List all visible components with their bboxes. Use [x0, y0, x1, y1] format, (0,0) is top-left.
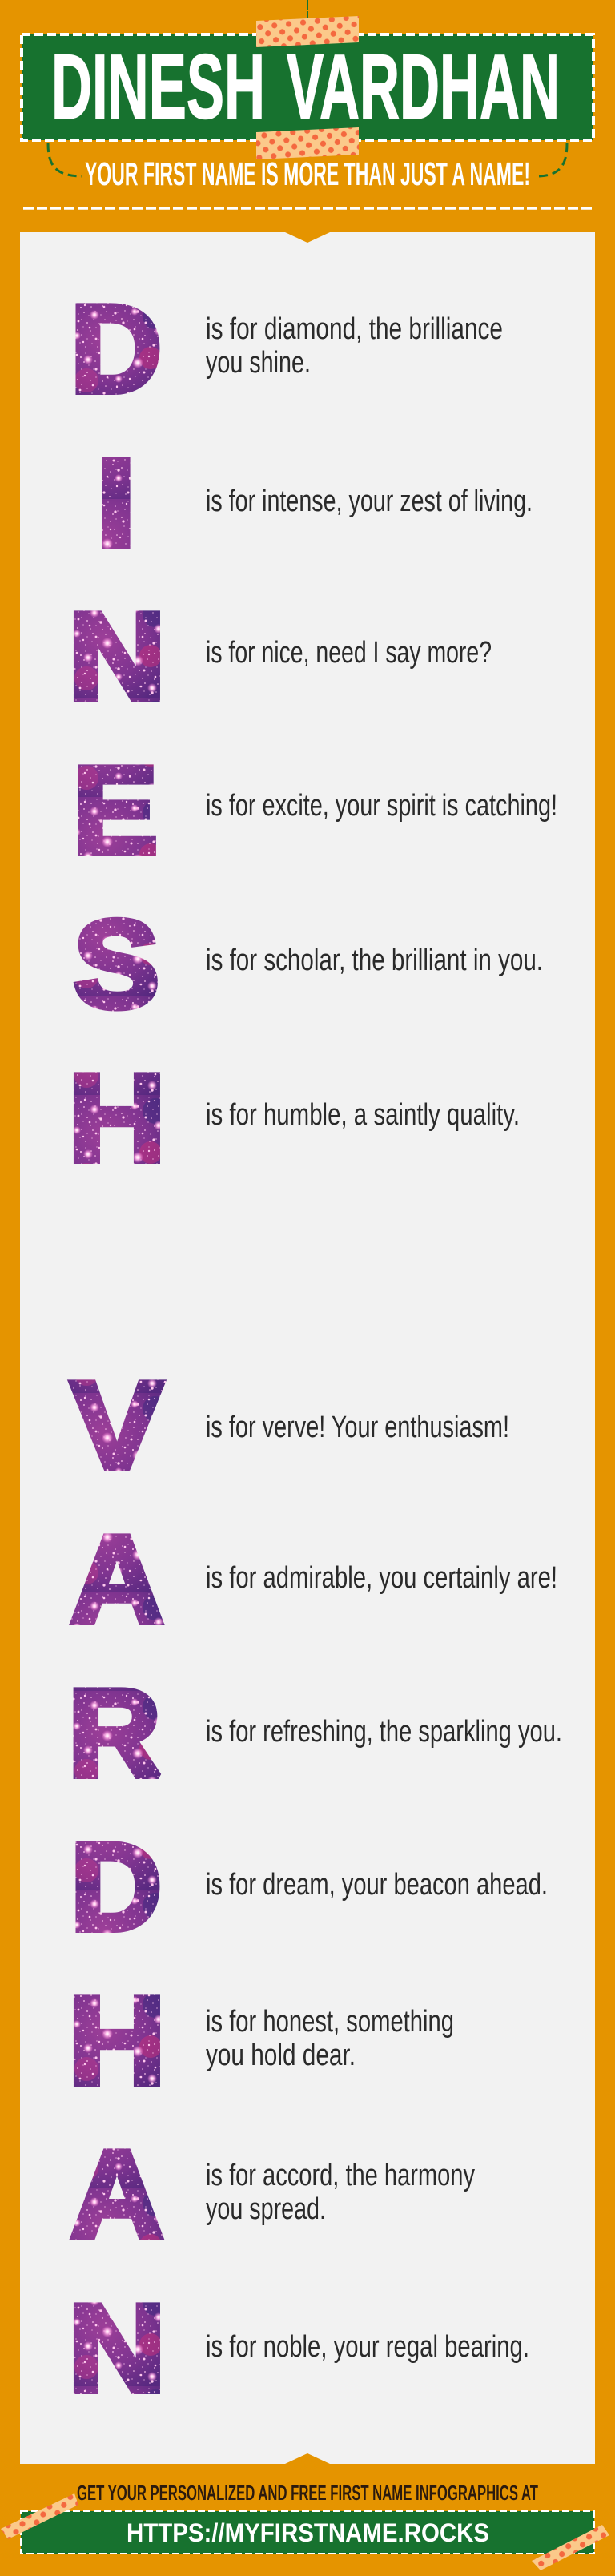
line: H	[206, 2005, 454, 2072]
tape: bottom of title	[256, 127, 359, 159]
line: N: is for nice, need I say more?	[206, 636, 492, 670]
line: D: you shine.	[206, 346, 311, 380]
hanging string	[307, 0, 308, 21]
letter E: E	[73, 741, 158, 879]
line: A: you spread.	[206, 2192, 326, 2226]
letter N: N	[68, 2279, 166, 2417]
line: D	[206, 312, 503, 380]
letter V: V	[71, 1356, 163, 1495]
letter A: A	[70, 2125, 163, 2264]
letter A: A	[70, 1510, 163, 1648]
line: H: is for humble, a saintly quality.	[206, 1098, 520, 1132]
line: A: is for accord, the harmony	[206, 2159, 475, 2192]
title banner	[22, 34, 593, 140]
line: N: is for noble, your regal bearing.	[206, 2330, 529, 2364]
dashed divider	[23, 207, 592, 210]
letter H: H	[68, 1049, 166, 1187]
letter D: D	[70, 280, 162, 418]
url: HTTPS://MYFIRSTNAME.ROCKS	[127, 2518, 489, 2547]
letter H: H	[68, 1971, 166, 2110]
dashed connector: right	[537, 143, 567, 176]
letter I: I	[96, 433, 136, 572]
letter D: D	[70, 1817, 162, 1956]
letter R: R	[68, 1664, 161, 1802]
dashed connector: left	[48, 143, 82, 176]
title: DINESH	[51, 37, 265, 138]
line: D: is for diamond, the brilliance	[206, 312, 503, 346]
tape: footer right	[532, 2525, 609, 2570]
footer url banner	[21, 2511, 594, 2554]
line: A	[206, 2159, 475, 2226]
line: V: is for verve! Your enthusiasm!	[206, 1411, 509, 1444]
tape: top	[256, 16, 359, 47]
line: H: is for honest, something	[206, 2005, 454, 2039]
line: H: you hold dear.	[206, 2039, 356, 2072]
title	[51, 37, 560, 138]
letter S: S	[74, 895, 159, 1033]
tape: footer left	[1, 2493, 78, 2539]
letter N: N	[68, 587, 166, 726]
